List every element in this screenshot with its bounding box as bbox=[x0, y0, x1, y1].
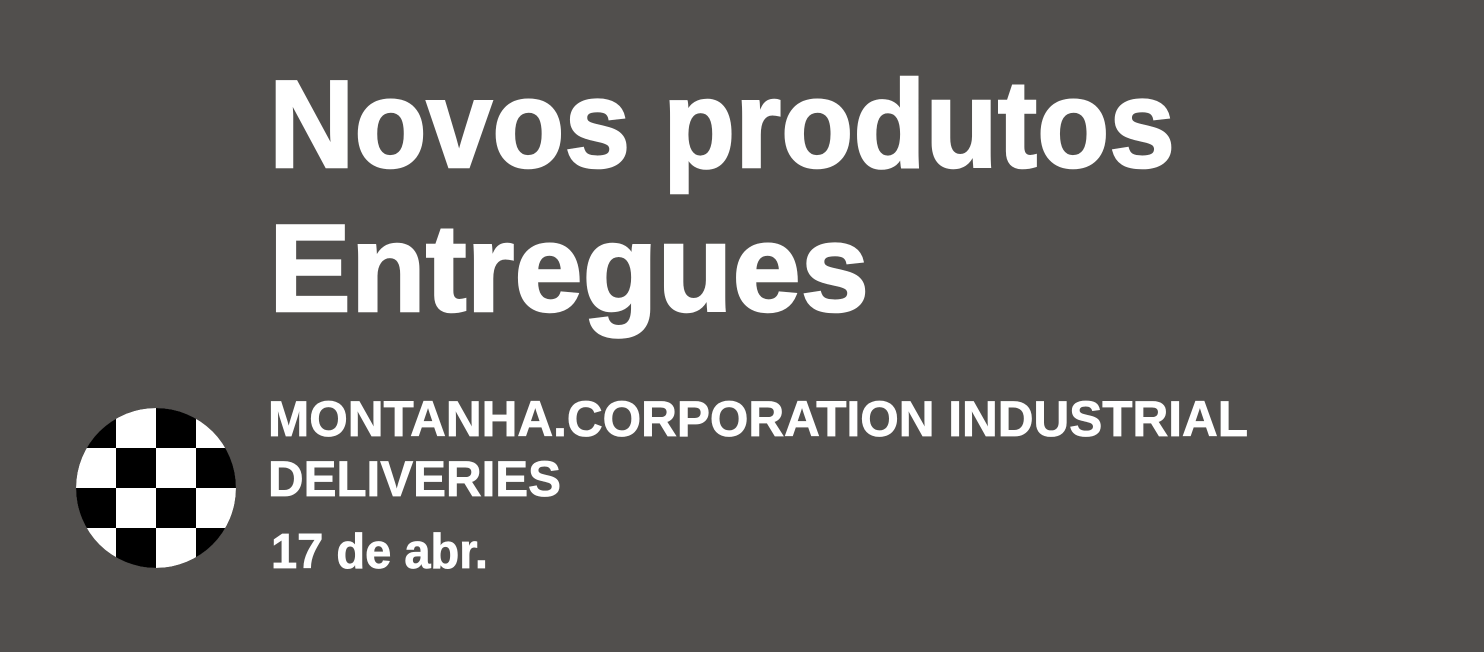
date: 17 de abr. bbox=[271, 525, 488, 579]
title: Novos produtos bbox=[269, 56, 1175, 194]
author name: MONTANHA.CORPORATION INDUSTRIAL bbox=[268, 391, 1248, 447]
title bbox=[269, 56, 1175, 338]
title: Entregues bbox=[269, 200, 869, 338]
author name: DELIVERIES bbox=[268, 451, 561, 507]
icon: checkered circle logo bbox=[76, 408, 236, 568]
author name bbox=[268, 391, 1248, 507]
